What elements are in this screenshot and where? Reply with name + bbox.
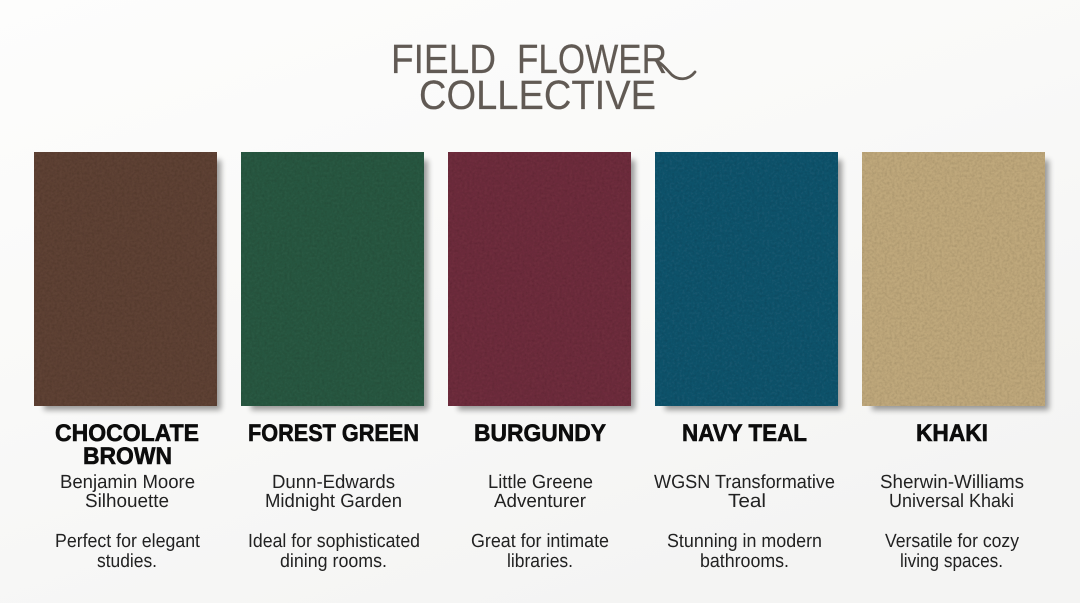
panel: navy teal	[654, 152, 842, 572]
swatch: forest green	[241, 152, 428, 410]
swatch: chocolate brown	[34, 152, 221, 410]
description: dining rooms: dining rooms.	[280, 551, 387, 572]
title: FLOWER	[517, 36, 667, 82]
description: cozy living spaces	[885, 531, 1019, 572]
description: elegant studies	[55, 531, 201, 572]
description: elegant studies: studies.	[97, 551, 157, 572]
description: intimate libraries: Great for intimate	[471, 531, 609, 552]
panel: forest green	[241, 152, 428, 572]
swatch: navy teal	[655, 152, 842, 410]
description: dining rooms	[248, 531, 420, 572]
heading: chocolate brown: CHOCOLATE	[55, 420, 199, 447]
title	[391, 36, 695, 118]
title: COLLECTIVE	[419, 72, 656, 118]
description: cozy living spaces: living spaces.	[900, 551, 1003, 572]
title: FIELD	[391, 36, 496, 82]
heading: chocolate brown	[55, 420, 199, 470]
panel: khaki	[862, 152, 1049, 572]
paint name: Little Greene Adventurer: Adventurer	[494, 491, 587, 512]
description: modern bathrooms: bathrooms.	[700, 551, 789, 572]
heading: navy teal: NAVY TEAL	[682, 420, 807, 447]
description: intimate libraries	[471, 531, 609, 572]
paint name: Dunn-Edwards Midnight Garden: Dunn-Edwards	[272, 472, 395, 493]
paint name: Dunn-Edwards Midnight Garden: Midnight Garden	[265, 491, 402, 512]
swatch: burgundy	[448, 152, 635, 410]
description: modern bathrooms: Stunning in modern	[667, 531, 822, 552]
paint name: Benjamin Moore Silhouette	[60, 472, 195, 512]
heading: burgundy: BURGUNDY	[474, 420, 606, 447]
description: modern bathrooms	[667, 531, 822, 572]
description: intimate libraries: libraries.	[507, 551, 573, 572]
paint name: Little Greene Adventurer: Little Greene	[488, 472, 593, 493]
heading: forest green: FOREST GREEN	[248, 420, 419, 447]
paint name: Sherwin-Williams Universal Khaki	[880, 472, 1024, 512]
paint name: Sherwin-Williams Universal Khaki: Universal Khaki	[889, 491, 1014, 512]
paint name: Benjamin Moore Silhouette: Benjamin Moore	[60, 472, 195, 493]
paint name: WGSN Transformative Teal: Teal	[728, 491, 766, 512]
description: dining rooms: Ideal for sophisticated	[248, 531, 420, 552]
paint name: Dunn-Edwards Midnight Garden	[265, 472, 402, 512]
paint name: Little Greene Adventurer	[488, 472, 593, 512]
heading: chocolate brown: BROWN	[83, 443, 172, 470]
paint name: WGSN Transformative Teal: WGSN Transformative	[654, 472, 835, 493]
description: cozy living spaces: Versatile for cozy	[885, 531, 1019, 552]
panel: chocolate brown	[34, 152, 221, 572]
paint name: Benjamin Moore Silhouette: Silhouette	[85, 491, 169, 512]
heading: khaki: KHAKI	[916, 420, 988, 447]
description: elegant studies: Perfect for elegant	[55, 531, 201, 552]
paint name: Sherwin-Williams Universal Khaki: Sherwin-Williams	[880, 472, 1024, 493]
swatch: khaki	[862, 152, 1049, 410]
panel: burgundy	[448, 152, 635, 572]
paint name: WGSN Transformative Teal	[654, 472, 835, 512]
